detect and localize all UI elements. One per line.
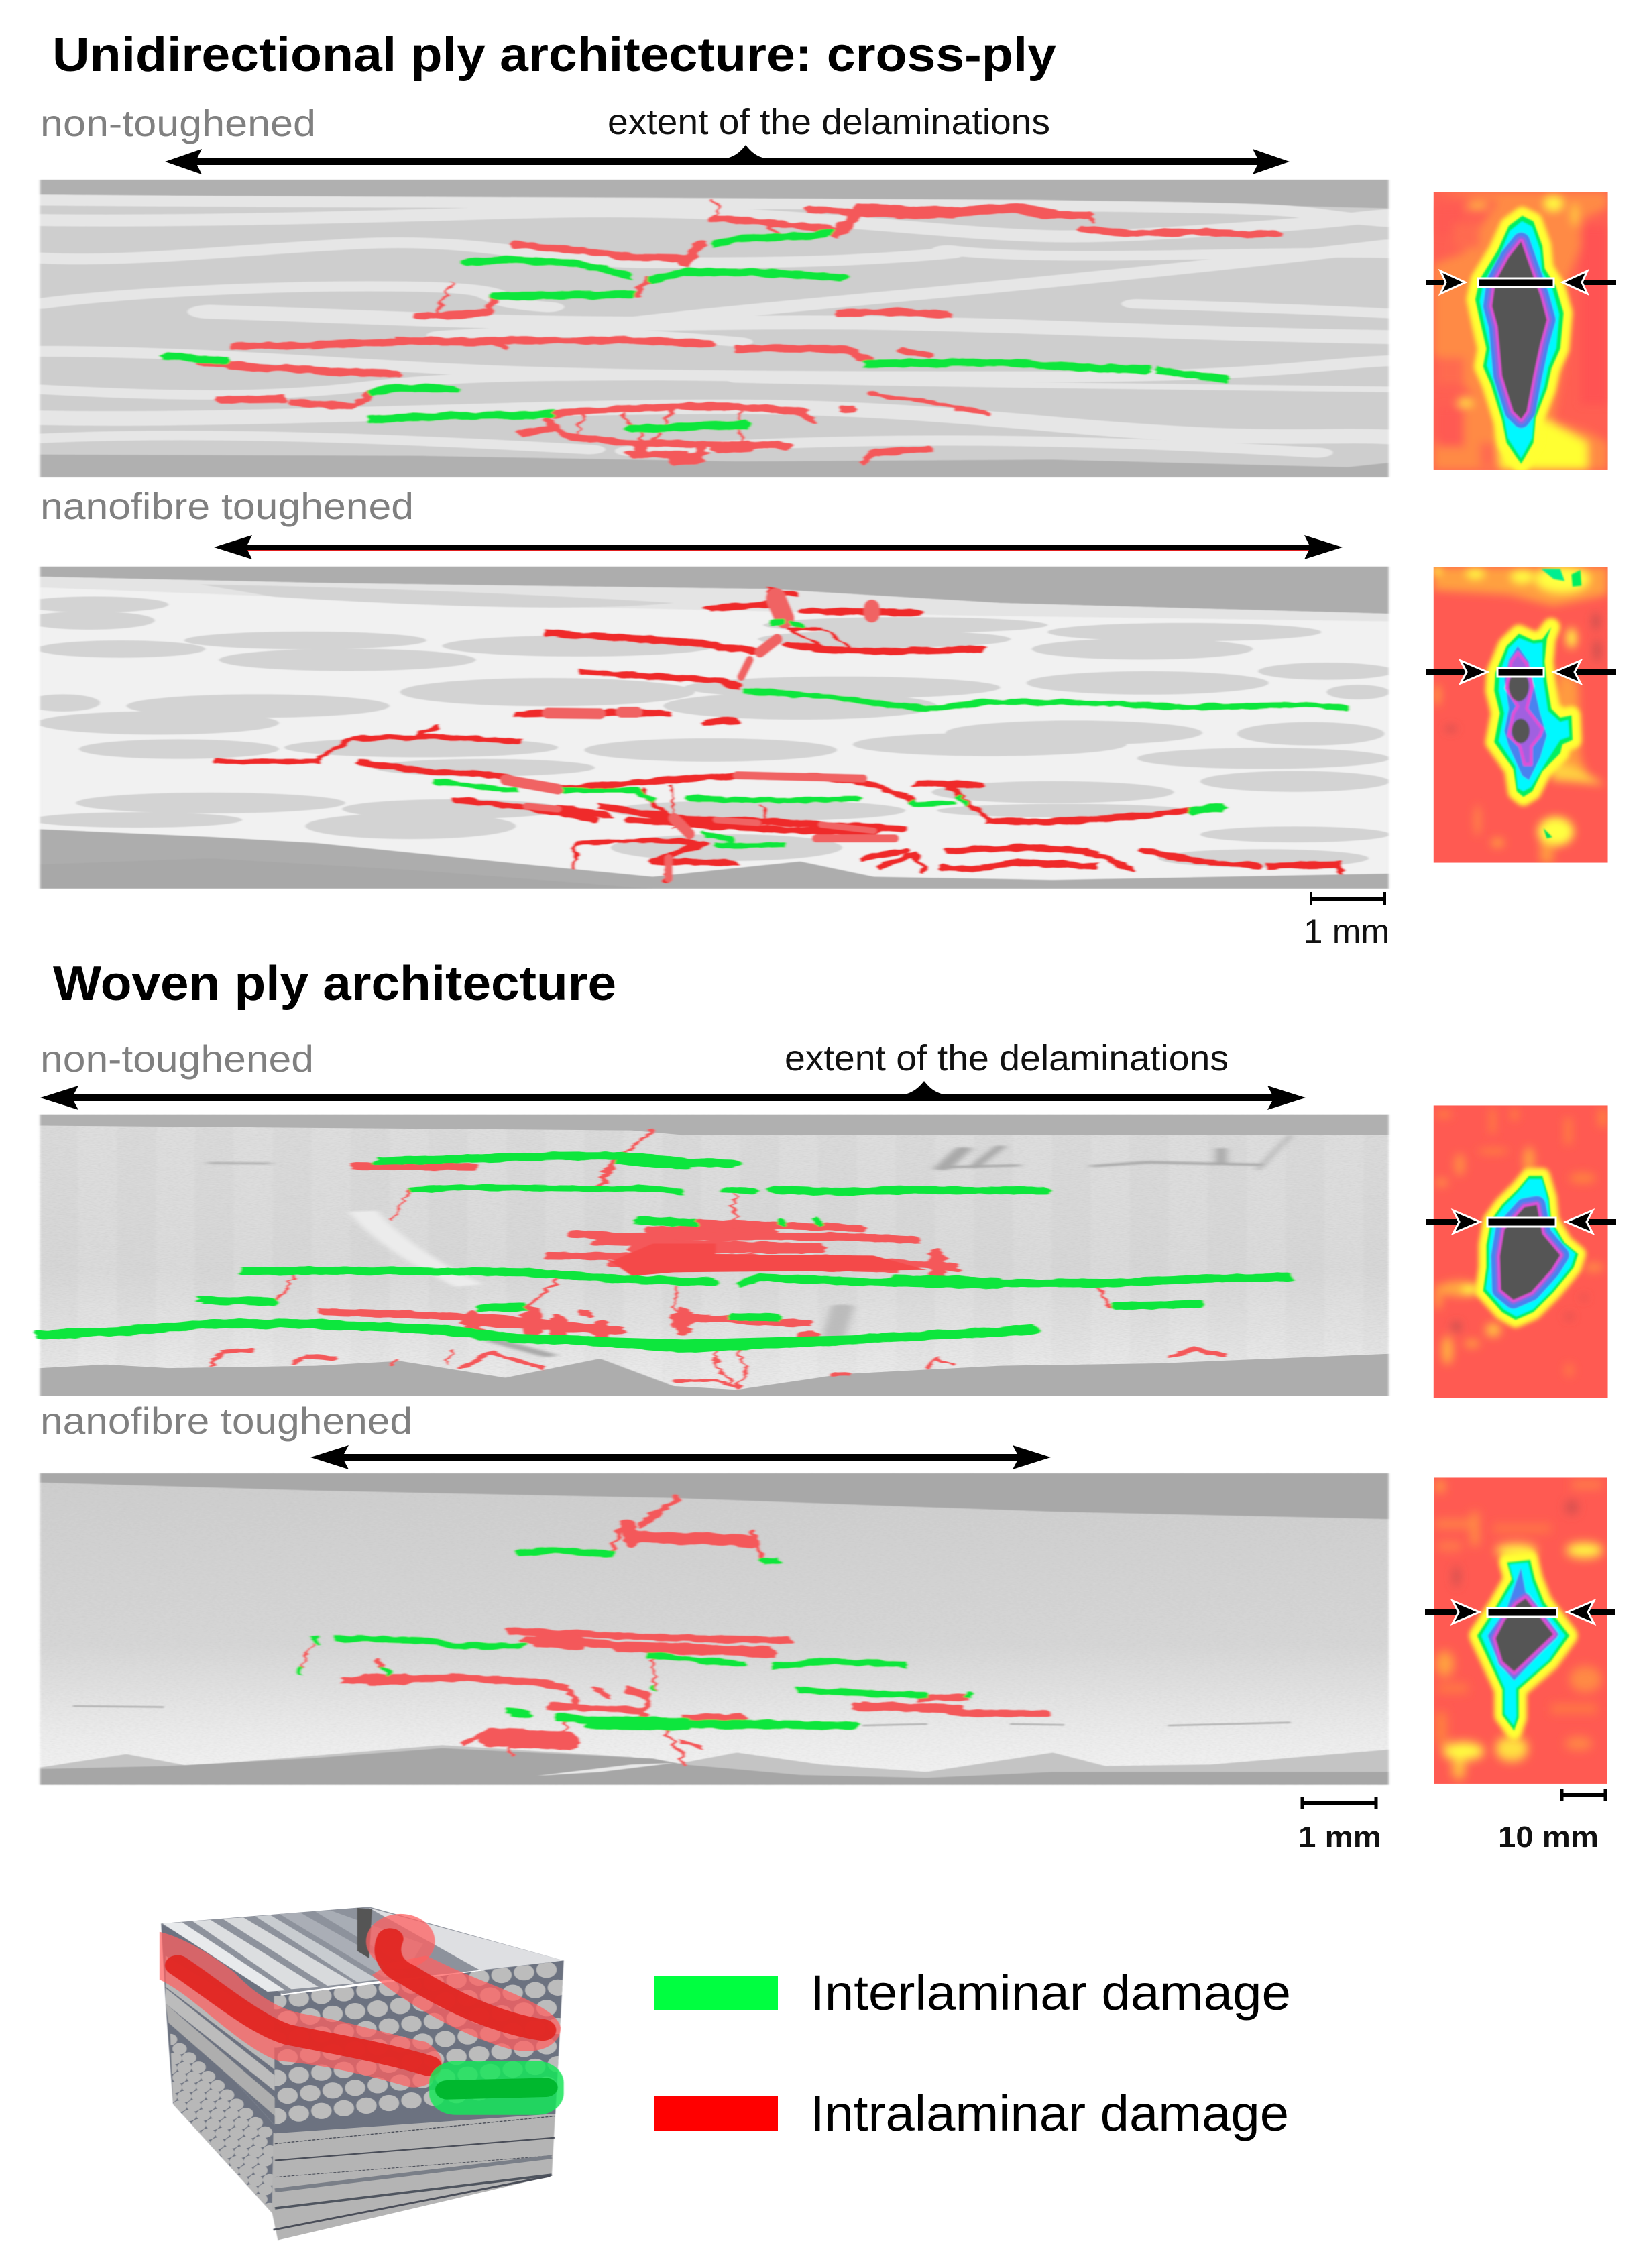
label: nanofibre toughened: nanofibre toughened xyxy=(40,485,414,527)
panel: woven toughened micrograph xyxy=(40,1473,1389,1785)
legend: interlaminar: Interlaminar damage xyxy=(810,1965,1291,2021)
thick damage blotches xyxy=(506,598,895,878)
arrow: extent cross-ply non-toughened xyxy=(165,145,1290,174)
scale bar: 1 mm xyxy=(1298,1797,1381,1854)
heatmap: cross-ply non-toughened xyxy=(1434,192,1608,470)
title: woven: Woven ply architecture xyxy=(53,957,616,1011)
intralaminar damage lines xyxy=(200,199,1279,462)
panel: woven non-toughened micrograph xyxy=(40,1115,1389,1396)
markers: heatmap arrows and bar xyxy=(1426,271,1616,294)
markers: heatmap arrows and bar xyxy=(1426,661,1616,683)
cube front lower strips xyxy=(272,2111,555,2241)
diagram: 3D ply cube with damage xyxy=(160,1907,564,2241)
title: unidirectional: Unidirectional ply architecture: cross-ply xyxy=(52,28,1056,82)
arrow: extent woven non-toughened xyxy=(40,1081,1306,1110)
interlaminar damage lines xyxy=(436,622,1348,846)
label: nanofibre toughened woven: nanofibre toughened xyxy=(40,1400,412,1442)
heatmap: woven toughened xyxy=(1434,1477,1607,1784)
scale bar: 1 mm: 1 mm xyxy=(1304,913,1389,950)
label: non-toughened: non-toughened xyxy=(40,102,316,144)
label: extent of the delaminations woven: extent of the delaminations xyxy=(785,1038,1229,1078)
damage overlay: intralaminar bands xyxy=(160,1914,561,2088)
intralaminar damage lines xyxy=(211,1130,1223,1387)
damage overlay: interlaminar band xyxy=(429,2061,564,2115)
panel: cross-ply toughened micrograph xyxy=(21,567,1395,889)
cube front fibre face xyxy=(274,1961,564,2133)
arrow: extent woven toughened xyxy=(310,1445,1051,1469)
label: non-toughened woven: non-toughened xyxy=(40,1037,314,1080)
interlaminar damage lines xyxy=(40,1156,1290,1348)
interlaminar damage lines xyxy=(165,233,1227,429)
intralaminar damage lines xyxy=(302,1499,1047,1764)
cube upper left strips xyxy=(161,1923,281,2131)
heatmap: woven non-toughened xyxy=(1434,1105,1608,1398)
thick green delamination xyxy=(516,1333,979,1353)
markers: heatmap arrows and bar xyxy=(1425,1601,1615,1624)
panel: cross-ply non-toughened micrograph xyxy=(40,180,1389,477)
dense red damage cluster xyxy=(611,1244,927,1276)
cube lower left fibres xyxy=(166,2004,280,2214)
markers: heatmap arrows and bar xyxy=(1426,1210,1616,1233)
cube top striped face xyxy=(161,1907,564,1994)
legend: intralaminar: Intralaminar damage xyxy=(810,2086,1289,2141)
scale bar: 10 mm: 10 mm xyxy=(1498,1821,1599,1854)
arrow: extent cross-ply toughened xyxy=(214,535,1343,559)
heatmap: cross-ply toughened xyxy=(1432,565,1608,863)
scale bar: 1 mm: 1 mm xyxy=(1298,1821,1381,1854)
scale bar: 1 mm xyxy=(1304,892,1389,950)
intralaminar damage lines xyxy=(216,591,1343,880)
label: extent of the delaminations: extent of the delaminations xyxy=(608,102,1050,142)
scale bar: 10 mm xyxy=(1498,1789,1606,1854)
interlaminar damage lines xyxy=(301,1550,971,1725)
